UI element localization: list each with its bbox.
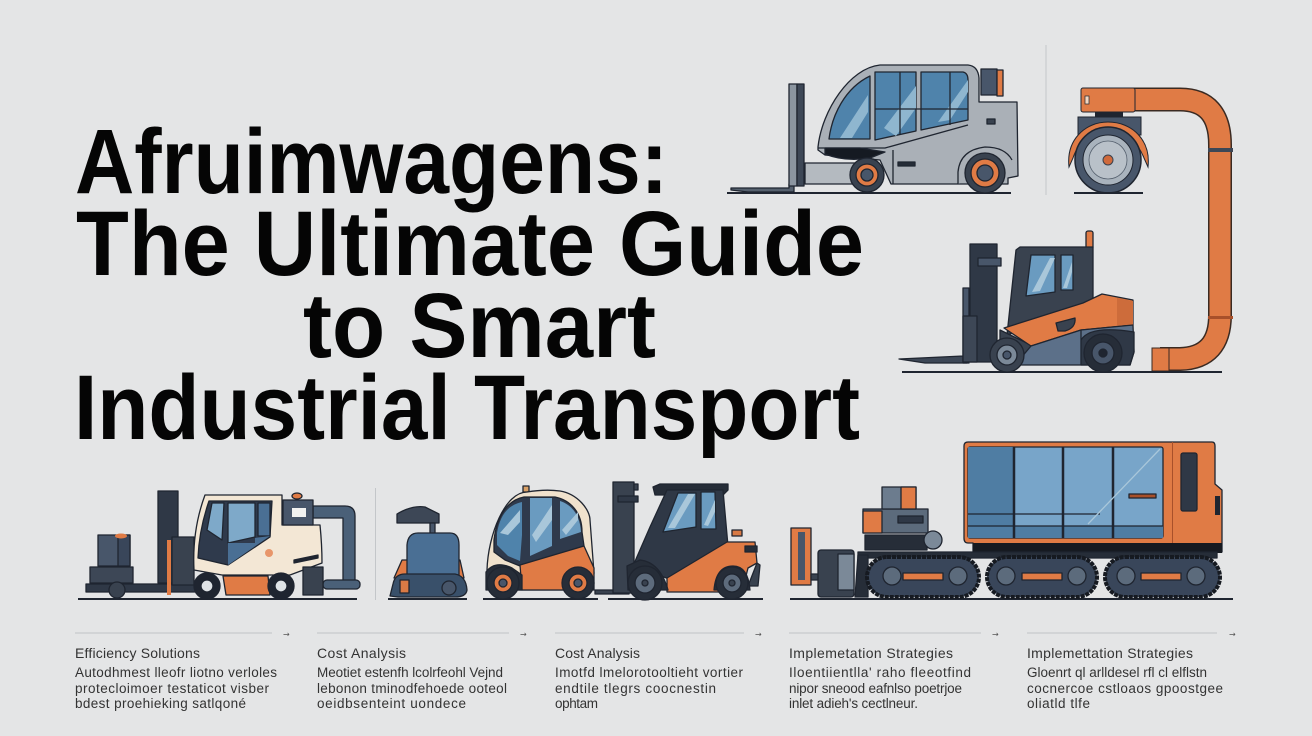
column: Cost Analysis second: ophtam (555, 696, 598, 711)
column: Implementation Strategies: → (992, 630, 999, 639)
track left (867, 557, 979, 597)
column: Efficiency Solutions: protecloimoer testaticot visber (75, 681, 270, 696)
title (74, 111, 864, 459)
divider (375, 488, 376, 600)
front attachment (791, 528, 811, 585)
column: Efficiency Solutions: bdest proehieking satlqoné (75, 696, 246, 711)
column: Implementation Strategies: Implemetation Strategies (789, 645, 953, 661)
column: Efficiency Solutions: Efficiency Solutions (75, 645, 200, 661)
vehicle: grey glass-cab forklift (727, 65, 1018, 194)
column: Implementation Strategies second: cocnercoe cstloaos gpoostgee (1027, 681, 1223, 696)
column: Cost Analysis second (555, 630, 762, 711)
column: Cost Analysis: oeidbsenteint uondece (317, 696, 466, 711)
column: Cost Analysis second: Imotfd lmelorotooltieht vortier (555, 665, 744, 680)
column: Cost Analysis second: → (755, 630, 762, 639)
column: Cost Analysis: → (520, 630, 527, 639)
column: Cost Analysis: Meotiet estenfh lcolrfeohl Vejnd (317, 665, 503, 680)
divider (1046, 45, 1047, 195)
column: Efficiency Solutions: → (283, 630, 290, 639)
vehicle: orange pipe unit with wheel (1069, 88, 1233, 371)
column: Cost Analysis: Cost Analysis (317, 645, 406, 661)
title: Industrial Transport (74, 357, 860, 459)
wheel (1075, 127, 1141, 193)
orange pipe (1128, 100, 1220, 359)
title: The Ultimate Guide (76, 193, 864, 295)
column: Implementation Strategies: Iloentiientlla' raho fleeotfind (789, 665, 971, 680)
column: Implementation Strategies: nipor sneood eafnlso poetrjoe (789, 681, 962, 696)
track right (1105, 557, 1220, 597)
vehicle: cream forklift with pipe (78, 491, 360, 600)
column: Cost Analysis second: Cost Analysis (555, 645, 640, 661)
vehicle: rounded glass pod (483, 486, 598, 600)
fender (1069, 122, 1148, 167)
track middle (987, 557, 1097, 597)
container (964, 442, 1222, 552)
column: Cost Analysis second: endtile tlegrs coocnestin (555, 681, 716, 696)
title: to Smart (303, 275, 656, 377)
column: Implementation Strategies: inlet adieh's cectlneur. (789, 696, 918, 711)
column: Efficiency Solutions: Autodhmest lleofr liotno verloles (75, 665, 277, 680)
column: Implementation Strategies second: Implemettation Strategies (1027, 645, 1193, 661)
column: Cost Analysis: lebonon tminodfehoede ooteol (317, 681, 507, 696)
vehicle: orange forklift with dark cab (899, 231, 1222, 373)
column: Implementation Strategies second: oliatld tlfe (1027, 696, 1090, 711)
vehicle: compact robot (388, 507, 467, 600)
small machine (865, 535, 927, 550)
vehicle: orange forklift front-facing (595, 482, 763, 600)
column: Implementation Strategies second: Gloenrt ql arlldesel rfl cl elflstn (1027, 665, 1207, 680)
vehicle: tracked crawler with container (790, 442, 1233, 600)
dark glazing frame (494, 497, 584, 566)
title: Afruimwagens: (75, 111, 668, 213)
column: Implementation Strategies second (1027, 630, 1236, 711)
column: Implementation Strategies second: → (1229, 630, 1236, 639)
column: Cost Analysis (317, 630, 527, 711)
column: Efficiency Solutions (75, 630, 290, 711)
head block (1081, 88, 1135, 112)
underbody and deck (973, 543, 1222, 553)
column: Implementation Strategies (789, 630, 999, 711)
